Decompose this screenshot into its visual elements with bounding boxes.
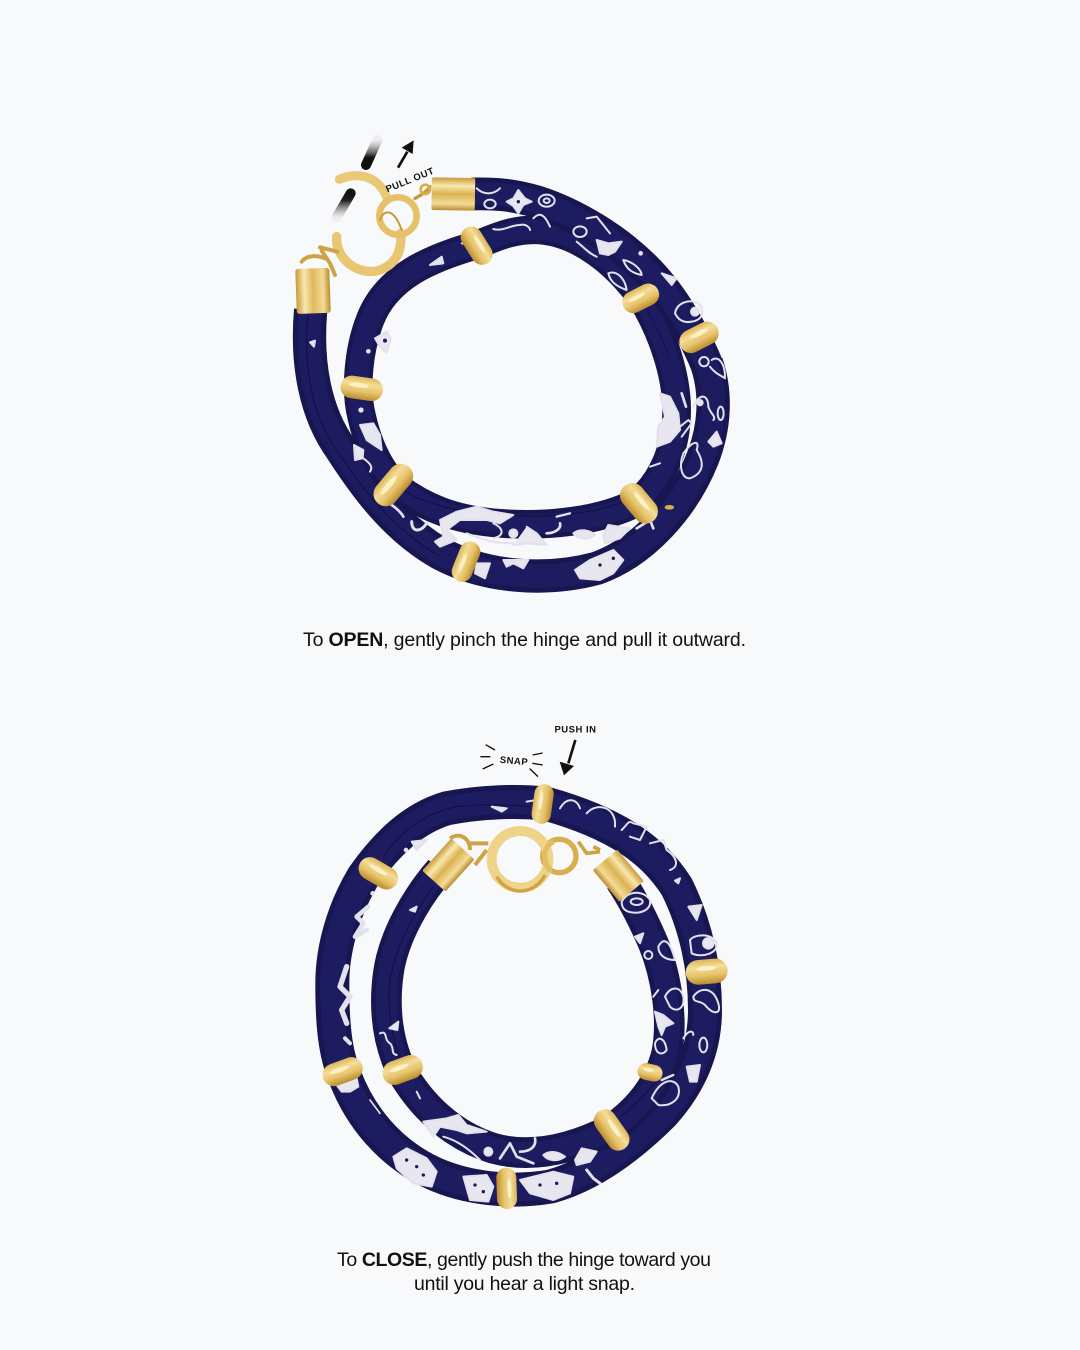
bead 8 [496,1167,517,1209]
fabric print [310,188,725,580]
bead 5 [368,459,418,511]
end cap: right [593,850,644,902]
hidden bead edge [665,505,674,510]
clasp: small ring [543,839,576,873]
end cap: left [295,268,331,314]
bead 5 [685,958,729,986]
hinge clasp [450,831,600,891]
bracelet: closed state [319,740,729,1209]
clasp: upper arm [339,176,387,198]
bead 3 [675,318,723,357]
print: right side [650,301,725,478]
bead 1 [457,222,497,269]
cord: outer strand upper [472,194,708,368]
caption line 2: until you hear a light snap. [414,1273,635,1295]
print: top right [492,800,719,1012]
print: inner left side [310,225,530,472]
finger: upper pinch [366,140,377,165]
bead 6 [636,1062,664,1083]
bead 3 [319,1054,366,1089]
label: snap: SNAP [499,755,529,768]
clasp: left links [450,836,488,865]
print: right side [622,893,707,1105]
clasp: right link [415,187,430,198]
clasp: right link [578,842,600,853]
bead 1 [530,783,555,825]
finger: lower pinch [337,193,351,217]
bead 2 [354,853,402,894]
cord: outer strand lower [307,310,713,576]
clasp: ring shading [497,875,545,891]
label: push in: PUSH IN [554,724,597,736]
cord: inner strand [386,870,669,1153]
caption: open: To OPEN, gently pinch the hinge and pull it outward. [303,629,746,651]
fabric print [337,800,719,1202]
bead 4 [339,374,384,403]
bead 4 [379,1052,426,1088]
clasp: small ring overlap [545,842,553,871]
print: bottom strands [392,505,653,580]
hinge clasp [302,176,430,275]
bead 7 [449,538,483,585]
print: bottom paisley [393,1115,600,1202]
clasp: right loop [421,185,430,194]
arrow: pull out [398,140,414,168]
clasp: jump ring [379,197,417,235]
cord: outer loop [332,802,705,1190]
end cap: left [422,838,474,892]
cord: inner loop [358,230,677,524]
print: outer left [337,840,427,1113]
caption: close [337,1249,711,1295]
caption line 1: To CLOSE, gently push the hinge toward you [337,1249,711,1271]
arrow: push in [560,740,575,775]
end cap: right [431,177,475,211]
clasp: left links [302,247,337,275]
bead 2 [618,280,663,317]
bead 6 [615,478,663,529]
snap rays [480,745,543,777]
clasp: large ring [492,831,548,888]
bracelet: open state [295,140,725,585]
label: pull out: PULL OUT [384,166,436,195]
clasp: lower arm [337,233,401,271]
print: inner left [380,907,420,1098]
print: upper strand [477,188,677,290]
clasp: inner ring arc [380,212,402,230]
bead 7 [589,1105,634,1155]
